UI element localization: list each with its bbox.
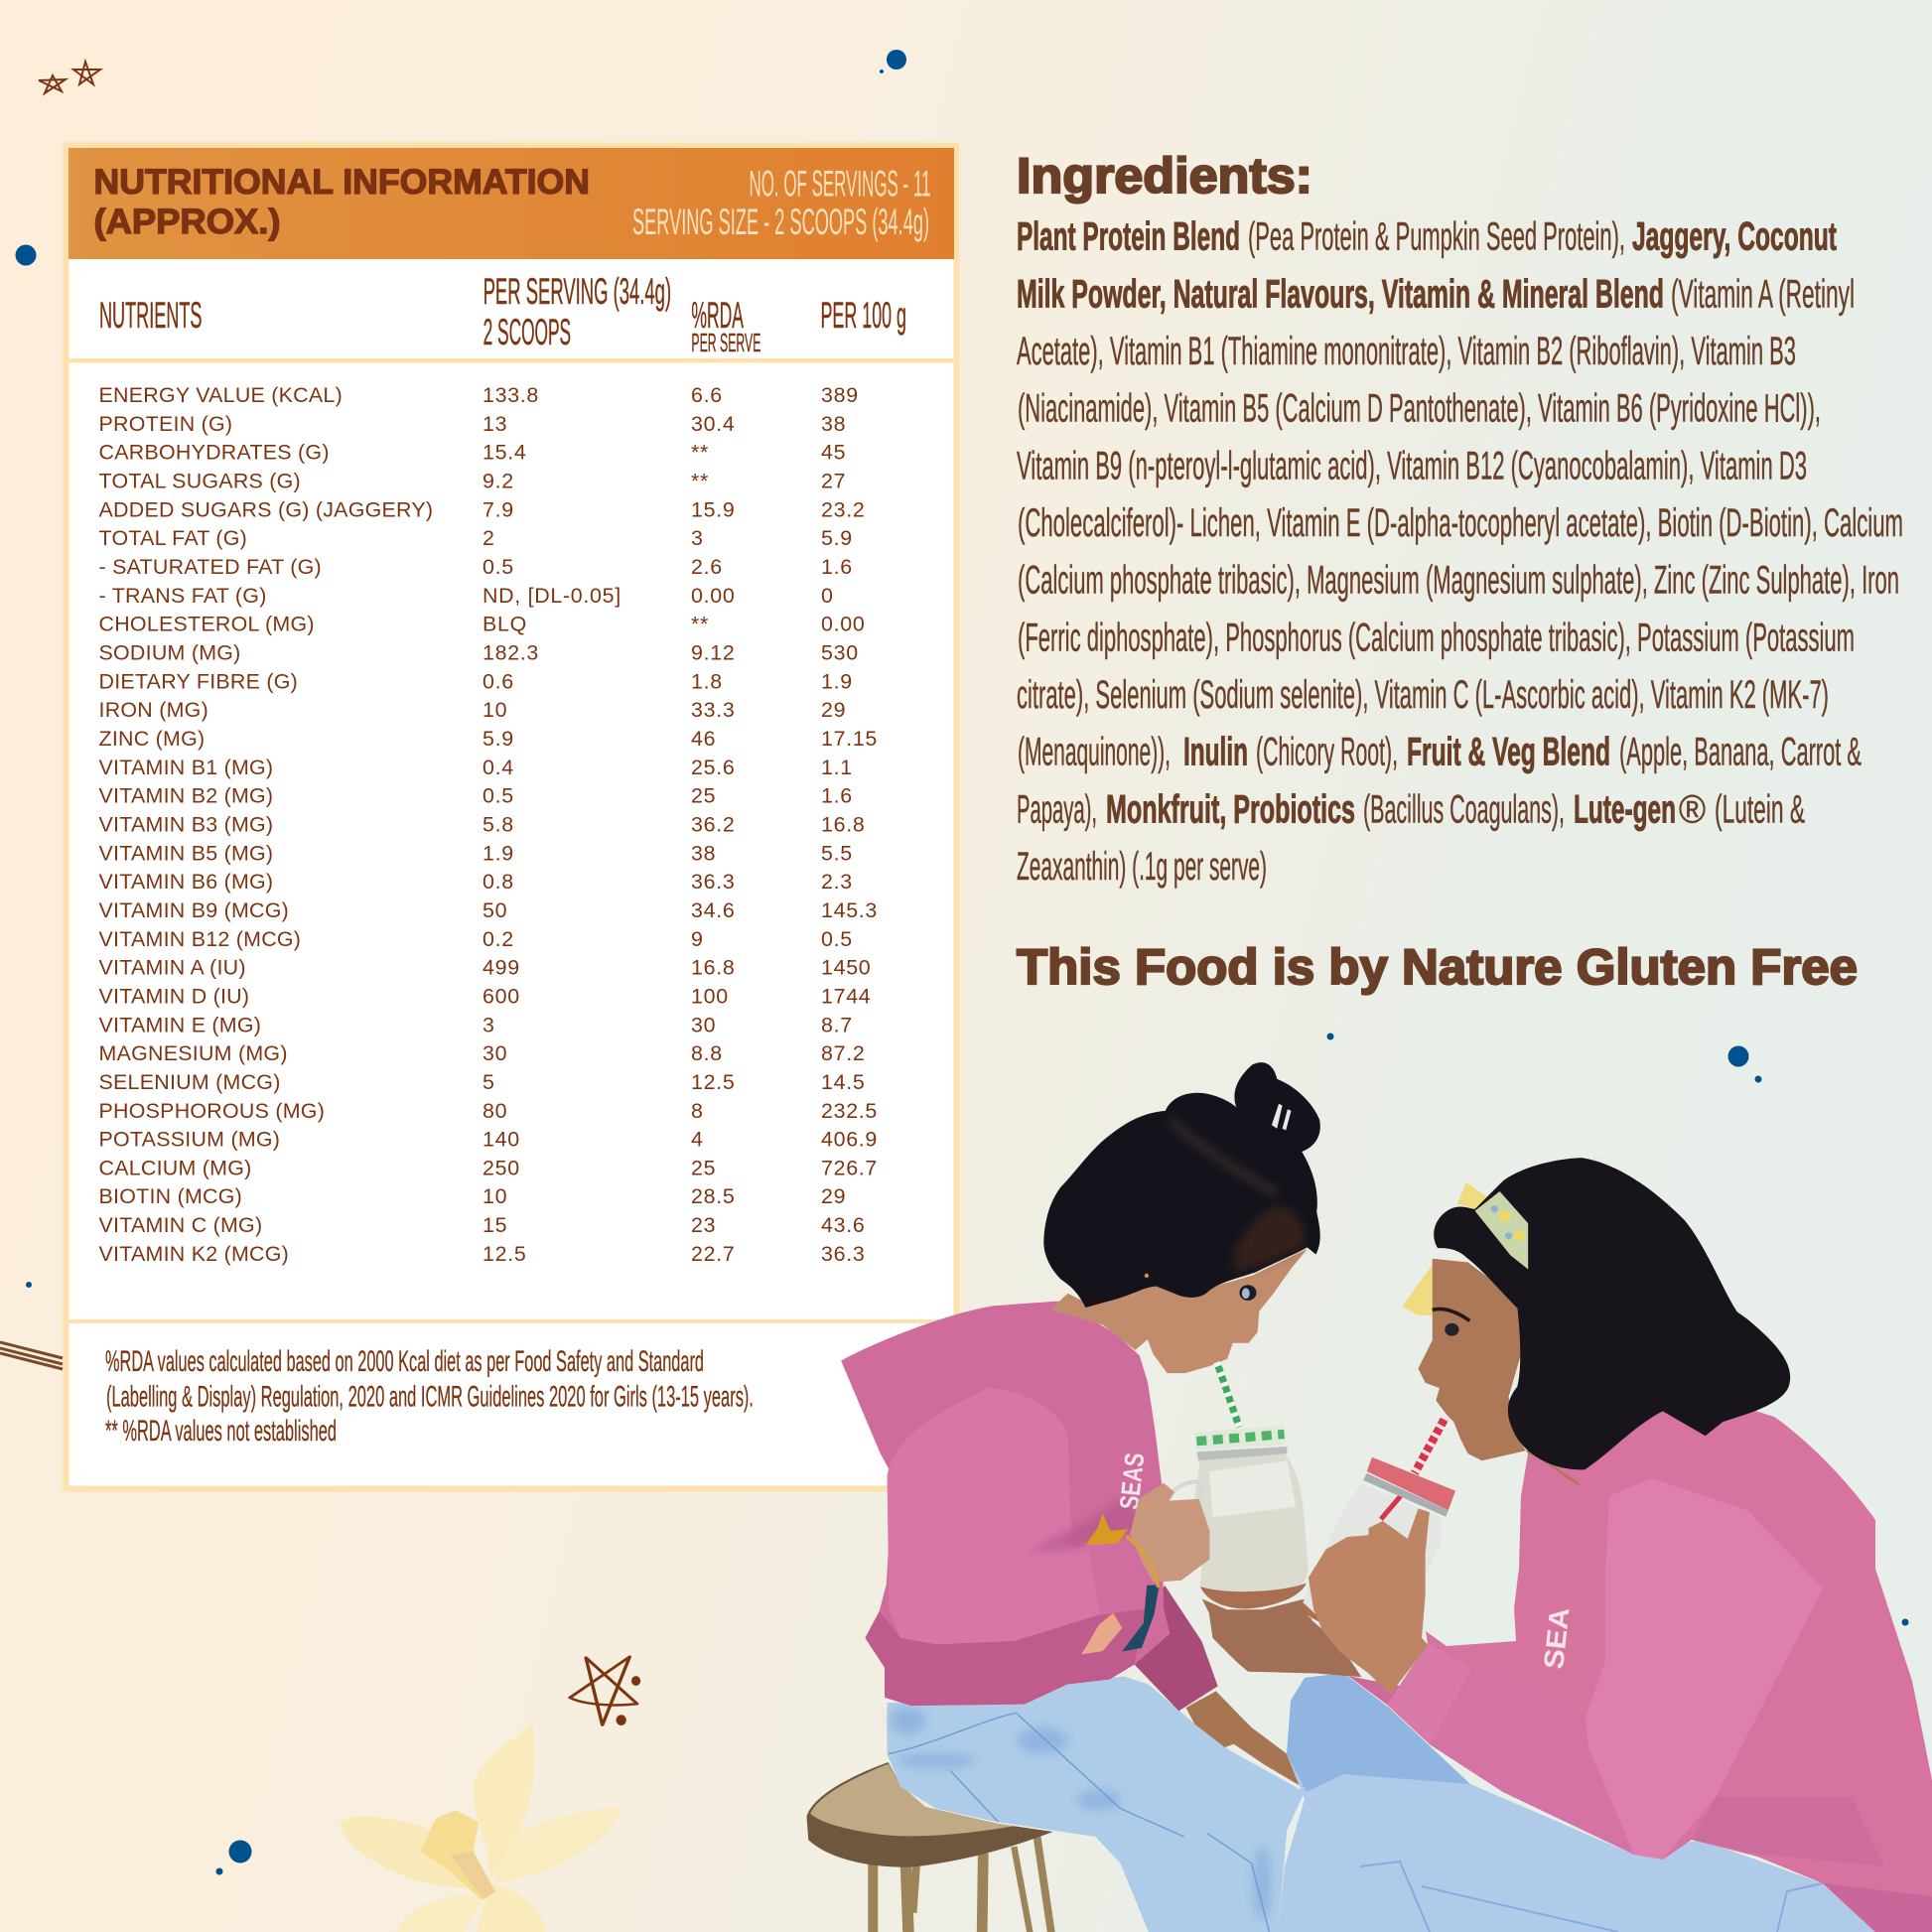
table rows: 15.9 [691, 497, 735, 521]
table rows: 145.3 [821, 898, 878, 922]
table rows: BIOTIN (MCG) [99, 1184, 242, 1208]
table rows: 16.8 [691, 956, 735, 980]
table rows: 726.7 [821, 1156, 878, 1179]
table rows: 232.5 [821, 1099, 878, 1123]
footnote: %RDA values calculated based on 2000 Kcal diet as per Food Safety and Standard [105, 1345, 704, 1378]
table rows: 5.5 [821, 841, 853, 865]
icon: vanilla flower [341, 1725, 624, 1932]
table rows: 7.9 [483, 497, 514, 521]
table rows: 5.9 [483, 727, 514, 751]
text block: ingredients list: (Bacillus Coagulans), [1363, 787, 1565, 831]
table rows: 389 [821, 383, 859, 407]
table rows: 12.5 [691, 1070, 735, 1094]
table rows: 43.6 [821, 1213, 865, 1237]
table rows: 8.7 [821, 1013, 853, 1036]
title [93, 163, 590, 241]
table rows: POTASSIUM (MG) [99, 1128, 280, 1152]
icon: sketched star [570, 1657, 640, 1725]
big girl hair [1434, 1158, 1790, 1469]
table rows: 45 [821, 441, 846, 465]
table rows: ADDED SUGARS (G) (JAGGERY) [99, 497, 433, 521]
small girl head [1043, 1062, 1320, 1373]
table rows: 30 [691, 1013, 716, 1036]
table header band: NO. OF SERVINGS - 11 [749, 163, 931, 205]
table rows: 25 [691, 1156, 716, 1179]
table rows: VITAMIN C (MG) [99, 1213, 262, 1237]
footnote: (Labelling & Display) Regulation, 2020 and ICMR Guidelines 2020 for Girls (13-15 years). [106, 1380, 754, 1414]
table rows: 25 [691, 784, 716, 808]
table rows: 28.5 [691, 1184, 735, 1208]
headband [1475, 1191, 1528, 1270]
table rows: 9.12 [691, 641, 735, 665]
footnote [105, 1345, 754, 1448]
table rows: 2.6 [691, 555, 723, 579]
table rows: 8.8 [691, 1041, 723, 1065]
table rows: 5 [483, 1070, 495, 1094]
text block: ingredients list: (Lutein & [1715, 787, 1805, 831]
photo: two girls drinking shakes [806, 1062, 1932, 1932]
small girl sleeve cuff [1135, 1586, 1218, 1711]
table rows: VITAMIN B3 (MG) [99, 812, 273, 836]
table rows: 15 [483, 1213, 507, 1237]
text block: ingredients list: Lute-gen [1574, 787, 1676, 831]
table rows: 1.1 [821, 756, 853, 779]
table rows: CALCIUM (MG) [99, 1156, 252, 1179]
table rows: ** [691, 469, 709, 492]
table rows: 50 [483, 898, 507, 922]
small girl face [1050, 1249, 1308, 1373]
table rows: 22.7 [691, 1242, 735, 1266]
small girl eye [1239, 1285, 1257, 1301]
hoodie print: small girl: SEAS [1113, 1451, 1150, 1511]
table rows: PHOSPHOROUS (MG) [99, 1099, 325, 1123]
small girl hoodie [841, 1302, 1170, 1706]
table rows: 30.4 [691, 412, 735, 436]
table rows: 23 [691, 1213, 716, 1237]
table rows: 1.6 [821, 784, 853, 808]
small girl hand on knee [1185, 1691, 1300, 1785]
table header band [69, 148, 954, 259]
text block: ingredients list: (Pea Protein & Pumpkin Seed Protein), [1248, 215, 1625, 259]
table rows: 38 [821, 412, 846, 436]
big girl hoodie [1348, 1390, 1932, 1932]
big girl head [1402, 1156, 1790, 1487]
table rows: 10 [483, 698, 507, 722]
icon: sketched stars top left [39, 62, 100, 93]
table rows: 2 [483, 526, 495, 550]
table rows: 530 [821, 641, 859, 665]
table rows: 38 [691, 841, 716, 865]
table rows: VITAMIN E (MG) [99, 1013, 261, 1036]
table rows: 16.8 [821, 812, 865, 836]
table rows [99, 383, 878, 1266]
panel: nutrition table: PER 100 g [820, 295, 906, 336]
table rows: 9.2 [483, 469, 514, 492]
table rows: 25.6 [691, 756, 735, 779]
table rows: 12.5 [483, 1242, 526, 1266]
table rows: 8 [691, 1099, 704, 1123]
table rows: 0.4 [483, 756, 514, 779]
table rows: 87.2 [821, 1041, 865, 1065]
column headers [99, 271, 906, 357]
table rows: 499 [483, 956, 520, 980]
table rows: SELENIUM (MCG) [99, 1070, 281, 1094]
table rows: 0.5 [483, 784, 514, 808]
table rows: 0.5 [821, 927, 853, 951]
title: NUTRITIONAL INFORMATION [93, 163, 590, 202]
table rows: 182.3 [483, 641, 539, 665]
red straw and jar [1303, 1417, 1455, 1631]
text block: ingredients list: Inulin [1183, 731, 1248, 774]
big girl lower hand [1202, 1599, 1361, 1677]
table rows: 0.2 [483, 927, 514, 951]
table rows: 406.9 [821, 1128, 878, 1152]
table rows: 0.5 [483, 555, 514, 579]
table rows: 0.00 [821, 613, 865, 636]
navy sleeve strip [1122, 1586, 1160, 1651]
table rows: 46 [691, 727, 716, 751]
table rows: TOTAL SUGARS (G) [99, 469, 301, 492]
bun highlight [1272, 1104, 1292, 1131]
table rows: CARBOHYDRATES (G) [99, 441, 330, 465]
table rows: 1.6 [821, 555, 853, 579]
big girl jeans [1278, 1673, 1875, 1932]
table rows: 10 [483, 1184, 507, 1208]
table rows: 80 [483, 1099, 507, 1123]
table header band: SERVING SIZE - 2 SCOOPS (34.4g) [632, 202, 929, 242]
table rows: VITAMIN A (IU) [99, 956, 246, 980]
column headers: NUTRIENTS [99, 295, 203, 336]
table rows: 36.3 [821, 1242, 865, 1266]
table rows: TOTAL FAT (G) [99, 526, 247, 550]
table rows: 29 [821, 1184, 846, 1208]
table rows: 0.6 [483, 669, 514, 693]
green straw and jar [1191, 1362, 1309, 1609]
table rows: 3 [483, 1013, 495, 1036]
table rows: ENERGY VALUE (KCAL) [99, 383, 343, 407]
big girl face [1418, 1259, 1582, 1487]
earring [1145, 1274, 1149, 1278]
text block: ingredients list: (Chicory Root), [1256, 731, 1398, 774]
table rows: VITAMIN B2 (MG) [99, 784, 273, 808]
table rows: - SATURATED FAT (G) [99, 555, 322, 579]
table rows: 2.3 [821, 870, 853, 894]
table rows: 0.00 [691, 584, 735, 608]
text block: ingredients list: Fruit & Veg Blend [1407, 731, 1610, 774]
table rows: 14.5 [821, 1070, 865, 1094]
table rows: VITAMIN K2 (MCG) [99, 1242, 289, 1266]
table rows: 27 [821, 469, 846, 492]
patches on belly [1081, 1613, 1122, 1654]
big girl bow [1402, 1156, 1611, 1315]
text block: ingredients list: ® [1679, 787, 1706, 831]
table rows: 1.8 [691, 669, 723, 693]
table rows: - TRANS FAT (G) [99, 584, 267, 608]
table rows: DIETARY FIBRE (G) [99, 669, 298, 693]
table rows: 3 [691, 526, 704, 550]
table rows: ND, [DL-0.05] [483, 584, 621, 608]
text block: ingredients list [1017, 215, 1903, 889]
table rows: 133.8 [483, 383, 539, 407]
table rows: ** [691, 613, 709, 636]
column headers: PER SERVE [691, 328, 760, 357]
table rows: SODIUM (MG) [99, 641, 241, 665]
small girl jeans [888, 1676, 1305, 1932]
text block: ingredients list: Plant Protein Blend [1017, 215, 1240, 259]
table rows: PROTEIN (G) [99, 412, 232, 436]
small girl hand holding jar [1127, 1482, 1209, 1587]
table rows: CHOLESTEROL (MG) [99, 613, 315, 636]
table rows: ZINC (MG) [99, 727, 205, 751]
table rows: VITAMIN B1 (MG) [99, 756, 273, 779]
table rows: IRON (MG) [99, 698, 208, 722]
hoodie print: big girl: SEA [1538, 1606, 1575, 1671]
gold star print [1085, 1513, 1128, 1545]
table rows: 600 [483, 984, 520, 1008]
icon: stick at left edge [0, 1342, 63, 1369]
table rows: VITAMIN B9 (MCG) [99, 898, 289, 922]
text block: ingredients list: Papaya), [1017, 787, 1097, 831]
table rows: 5.9 [821, 526, 853, 550]
column headers: %RDA [691, 295, 744, 336]
table rows: 33.3 [691, 698, 735, 722]
heading: gluten free: This Food is by Nature Gluten Free [1017, 939, 1858, 995]
big girl upper hand [1309, 1508, 1430, 1695]
table rows: 13 [483, 412, 507, 436]
table rows: VITAMIN B6 (MG) [99, 870, 273, 894]
table rows: 9 [691, 927, 704, 951]
text block: ingredients list: (Menaquinone)), [1018, 731, 1171, 774]
table rows: 0.8 [483, 870, 514, 894]
heading: ingredients: Ingredients: [1017, 148, 1312, 204]
table rows: 34.6 [691, 898, 735, 922]
table rows: 36.3 [691, 870, 735, 894]
table rows: 0 [821, 584, 834, 608]
table rows: 5.8 [483, 812, 514, 836]
table rows: 23.2 [821, 497, 865, 521]
column headers: PER SERVING (34.4g) [483, 271, 671, 312]
stool [806, 1762, 1053, 1932]
table rows: 4 [691, 1128, 704, 1152]
table rows: 6.6 [691, 383, 723, 407]
table rows: ** [691, 441, 709, 465]
table rows: 250 [483, 1156, 520, 1179]
table rows: 29 [821, 698, 846, 722]
table rows: 30 [483, 1041, 507, 1065]
table rows: 17.15 [821, 727, 878, 751]
table rows: 140 [483, 1128, 520, 1152]
table rows: VITAMIN B12 (MCG) [99, 927, 301, 951]
hair part and fringe highlight [1171, 1120, 1305, 1272]
table rows: 100 [691, 984, 729, 1008]
table rows: 15.4 [483, 441, 526, 465]
table rows: 1450 [821, 956, 871, 980]
table rows: VITAMIN D (IU) [99, 984, 249, 1008]
table rows: 1744 [821, 984, 871, 1008]
table rows: 36.2 [691, 812, 735, 836]
column headers: 2 SCOOPS [483, 312, 571, 352]
text block: ingredients list: Monkfruit, Probiotics [1106, 787, 1355, 831]
panel: nutrition table [66, 145, 957, 1489]
servings info [632, 163, 931, 242]
table rows: BLQ [483, 613, 527, 636]
table rows: 1.9 [483, 841, 514, 865]
title: (APPROX.) [93, 203, 280, 241]
text block: ingredients list: Zeaxanthin) (.1g per serve) [1017, 845, 1267, 889]
table rows: MAGNESIUM (MG) [99, 1041, 288, 1065]
small girl hair [1043, 1062, 1320, 1308]
footnote: ** %RDA values not established [105, 1415, 337, 1448]
table rows: 1.9 [821, 669, 853, 693]
big girl brow and eye [1433, 1309, 1469, 1336]
table rows: VITAMIN B5 (MG) [99, 841, 273, 865]
